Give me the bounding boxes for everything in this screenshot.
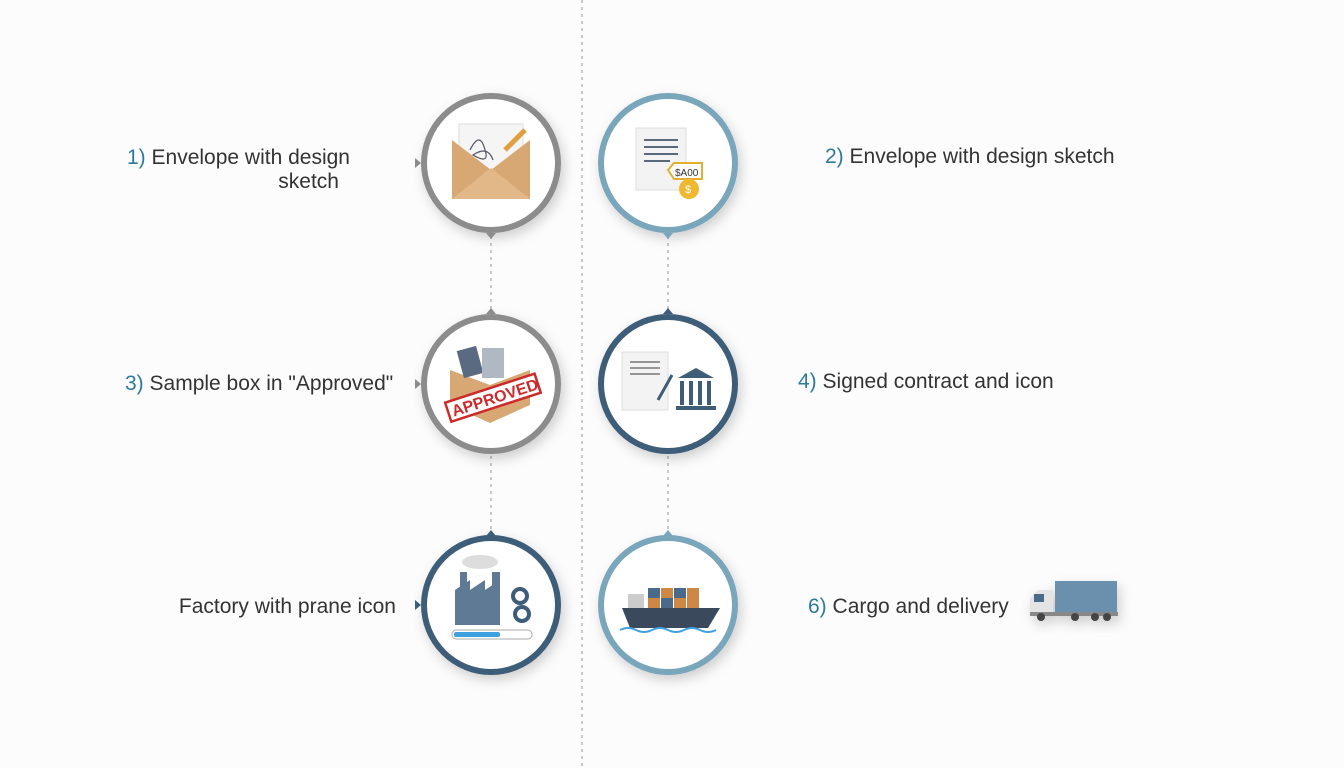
step 3 circle: approved sample box: [415, 308, 558, 451]
connector: left column: [490, 236, 492, 533]
label 3: 3) Sample box in "Approved": [125, 372, 393, 395]
label 5: Factory with prane icon: [179, 595, 396, 618]
label 1: [127, 146, 350, 193]
step 2 circle: invoice and price tag: [601, 96, 735, 239]
label 1: 1) Envelope with design: [127, 146, 350, 169]
step 1 circle: envelope: [415, 96, 558, 239]
label 6: 6) Cargo and delivery: [808, 595, 1009, 618]
label 4: 4) Signed contract and icon: [798, 370, 1054, 393]
label 1: sketch: [278, 170, 339, 193]
step 6 circle: cargo ship: [601, 530, 735, 672]
label 2: 2) Envelope with design sketch: [825, 145, 1115, 168]
connector: right column: [667, 236, 669, 533]
center divider: [581, 0, 583, 768]
icon: truck: [1030, 581, 1118, 621]
step 2 circle: invoice and price tag: $: [685, 184, 691, 196]
step 3 circle: approved sample box: APPROVED: [450, 377, 541, 420]
step 2 circle: invoice and price tag: $A00: [675, 168, 699, 179]
step 4 circle: signed contract and bank: [601, 308, 735, 451]
step 5 circle: factory: [415, 530, 558, 672]
